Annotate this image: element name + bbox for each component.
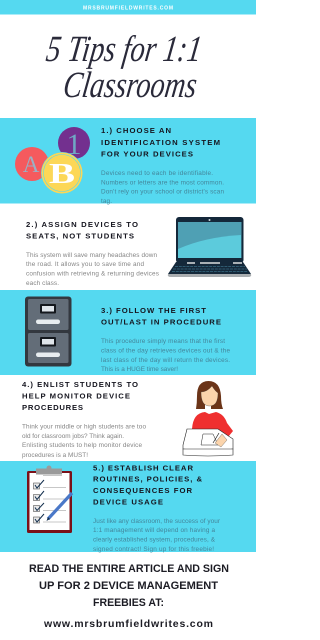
icon: clipboard with checklist and pen xyxy=(27,466,72,533)
text: tip 3 body xyxy=(101,338,230,373)
text: tip 3 body: class of the day retrieves devices out & the xyxy=(101,348,230,354)
top banner: MRSBRUMFIELDWRITES.COM xyxy=(83,6,173,12)
heading: tip 1: IDENTIFICATION SYSTEM xyxy=(101,138,220,147)
icon: letter and number circles xyxy=(15,127,90,194)
text: tip 4 body: Enlisting students to help monitor device xyxy=(22,442,142,449)
icon: laptop xyxy=(168,217,251,277)
heading: tip 3: OUT/LAST IN PROCEDURE xyxy=(101,318,221,326)
text: tip 1 body xyxy=(101,170,224,205)
text: tip 3 body: This is a HUGE time saver! xyxy=(101,366,178,373)
heading: tip 1: FOR YOUR DEVICES xyxy=(101,150,193,158)
top banner xyxy=(0,0,256,14)
text: tip 2 body xyxy=(26,252,159,287)
icon: letter and number circles: B xyxy=(49,158,75,190)
icon: filing cabinet xyxy=(25,296,72,366)
panel: tip 3 xyxy=(0,290,256,375)
heading: tip 5: DEVICE USAGE xyxy=(93,498,163,506)
call to action: FREEBIES AT: xyxy=(93,597,164,609)
call to action xyxy=(29,563,229,630)
heading: tip 1 xyxy=(101,126,220,158)
panel: tip 5 xyxy=(0,461,256,553)
icon: letter and number circles: A xyxy=(23,152,40,177)
heading: tip 1: 1.) CHOOSE AN xyxy=(101,126,171,135)
heading: tip 2: SEATS, NOT STUDENTS xyxy=(26,232,134,240)
panel: tip 1 xyxy=(0,118,256,205)
heading: tip 4: 4.) ENLIST STUDENTS TO xyxy=(22,380,138,389)
heading: tip 4: PROCEDURES xyxy=(22,403,83,412)
text: tip 4 body: Think your middle or high students are too xyxy=(22,424,146,430)
text: tip 1 body: tag. xyxy=(101,198,112,205)
website url: www.mrsbrumfieldwrites.com xyxy=(43,618,213,630)
text: tip 1 body: Numbers or letters are the most common. xyxy=(101,180,224,186)
heading: tip 4 xyxy=(22,380,138,412)
call to action: READ THE ENTIRE ARTICLE AND SIGN xyxy=(29,563,229,575)
title: Classrooms xyxy=(61,65,199,106)
text: tip 4 body: procedures is a MUST! xyxy=(22,452,88,459)
heading: tip 3: 3.) FOLLOW THE FIRST xyxy=(101,306,206,315)
icon: woman writing at desk xyxy=(183,381,233,456)
text: tip 5 body: clearly established system, procedures, & xyxy=(93,536,216,544)
title: 5 Tips for 1:1 xyxy=(44,29,204,70)
icon: letter and number circles: 1 xyxy=(66,128,82,161)
text: tip 5 body: Just like any classroom, the success of your xyxy=(93,518,221,525)
heading: tip 3 xyxy=(101,306,221,326)
text: tip 2 body: This system will save many headaches down xyxy=(26,252,157,259)
text: tip 5 body: signed contract! Sign up for this freebie! xyxy=(93,546,214,553)
heading: tip 4: HELP MONITOR DEVICE xyxy=(22,392,130,400)
text: tip 2 body: confusion with retrieving & returning devices xyxy=(26,270,159,278)
call to action: UP FOR 2 DEVICE MANAGEMENT xyxy=(39,580,218,592)
heading: tip 2: 2.) ASSIGN DEVICES TO xyxy=(26,220,138,229)
text: tip 1 body: Don't rely on your school or district's scan xyxy=(101,188,224,196)
text: tip 4 body: old for classroom jobs? Think again. xyxy=(22,433,124,440)
text: tip 3 body: This procedure simply means that the first xyxy=(101,338,225,345)
heading: tip 5 xyxy=(93,464,202,506)
text: tip 2 body: the road. It allows you to save time and xyxy=(26,261,144,268)
text: tip 5 body: 1:1 management will depend on having a xyxy=(93,527,215,534)
title xyxy=(44,29,204,106)
text: tip 4 body xyxy=(22,424,146,459)
text: tip 5 body xyxy=(93,518,221,553)
text: tip 3 body: last class of the day will return the devices. xyxy=(101,357,230,364)
heading: tip 2 xyxy=(26,220,138,240)
panel: tip 4 xyxy=(22,380,233,459)
heading: tip 5: ROUTINES, POLICIES, & xyxy=(93,474,202,484)
heading: tip 5: 5.) ESTABLISH CLEAR xyxy=(93,464,193,472)
panel: tip 2 xyxy=(26,217,251,287)
text: tip 2 body: each class. xyxy=(26,280,59,287)
heading: tip 5: CONSEQUENCES FOR xyxy=(93,486,192,495)
text: tip 1 body: Devices need to each be identifiable. xyxy=(101,170,213,177)
